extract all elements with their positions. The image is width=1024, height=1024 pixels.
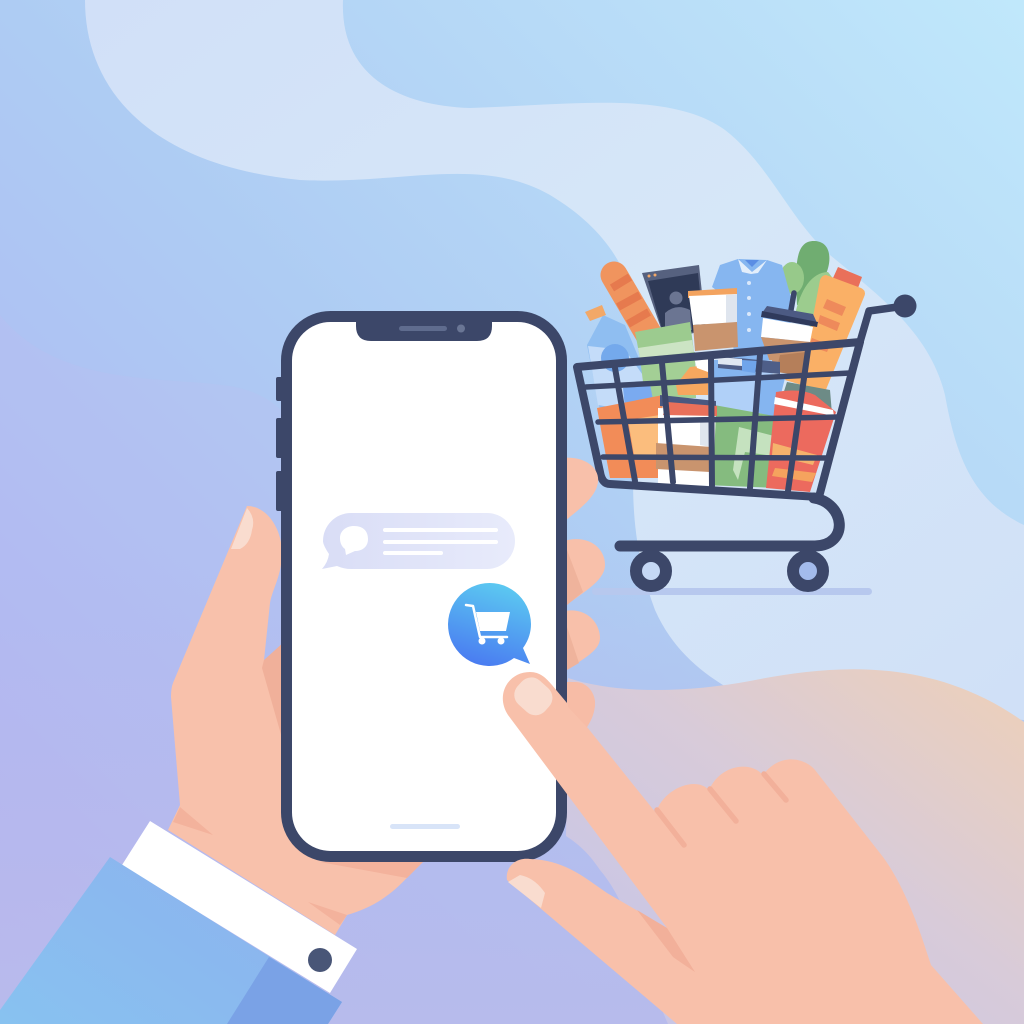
- left wheel: [636, 556, 666, 586]
- shopping cart with products: [577, 241, 916, 595]
- knuckle creases: [657, 774, 786, 845]
- blue shirt: [712, 259, 792, 370]
- home indicator: [390, 824, 460, 829]
- orange carton: [785, 267, 865, 392]
- finger 3: [560, 610, 600, 675]
- baguette: [612, 275, 652, 340]
- pointing hand: [503, 672, 983, 1024]
- notch: [356, 320, 492, 341]
- green box: [635, 322, 696, 398]
- cuff button: [308, 948, 332, 972]
- message bubble: [322, 513, 515, 569]
- cart ground shadow: [592, 588, 872, 595]
- finger 4: [560, 682, 595, 730]
- background lavender wash: [0, 540, 1024, 1024]
- products in the upper cart: [585, 241, 865, 412]
- base finger knuckle over phone edge: [568, 682, 595, 727]
- cart basket frame: [577, 342, 860, 497]
- cart handle: [860, 294, 916, 342]
- plant leaves: [780, 241, 838, 330]
- bottle: [585, 305, 650, 412]
- camera: [457, 324, 465, 332]
- chat icon: [340, 526, 368, 555]
- sleeve: [0, 857, 342, 1024]
- coffee cup with lid: [761, 293, 818, 376]
- left hand fingers behind phone: [560, 458, 605, 730]
- red can: [766, 382, 836, 492]
- thumb web shadow: [637, 910, 695, 972]
- paper cup: [656, 395, 717, 486]
- left hand palm and thumb: [168, 506, 430, 935]
- background wave: peach bottom right: [566, 669, 1024, 1024]
- cart icon: [466, 605, 510, 644]
- thumb nail: [231, 508, 253, 549]
- finger 2: [560, 539, 605, 610]
- background wave: lower left: [0, 315, 330, 1024]
- index fingernail: [509, 672, 558, 721]
- finger shading: [567, 550, 583, 670]
- cart chat bubble: [448, 583, 531, 666]
- message lines: [383, 528, 498, 555]
- green box centre: [705, 405, 780, 488]
- wrist creases: [173, 807, 423, 925]
- side buttons: [276, 377, 284, 511]
- background wave: light top band: [85, 0, 1024, 720]
- orange box: [597, 395, 663, 478]
- lower blue block: [623, 384, 654, 408]
- hanging blue shirt: [713, 356, 785, 420]
- phone body: [286, 316, 562, 856]
- palm shadow: [262, 642, 284, 745]
- smartphone: [276, 316, 562, 856]
- products in the lower cart: [597, 356, 836, 492]
- finger 1: [560, 458, 598, 525]
- speaker: [399, 326, 447, 331]
- shirt cuff: [122, 821, 357, 993]
- thumb nail: [508, 875, 545, 908]
- sleeve shaded panel: [227, 957, 342, 1024]
- cart lower frame: [620, 498, 839, 546]
- small orange item: [676, 358, 708, 395]
- tablet: [642, 265, 706, 340]
- coffee box: [688, 288, 738, 351]
- right wheel: [793, 556, 823, 586]
